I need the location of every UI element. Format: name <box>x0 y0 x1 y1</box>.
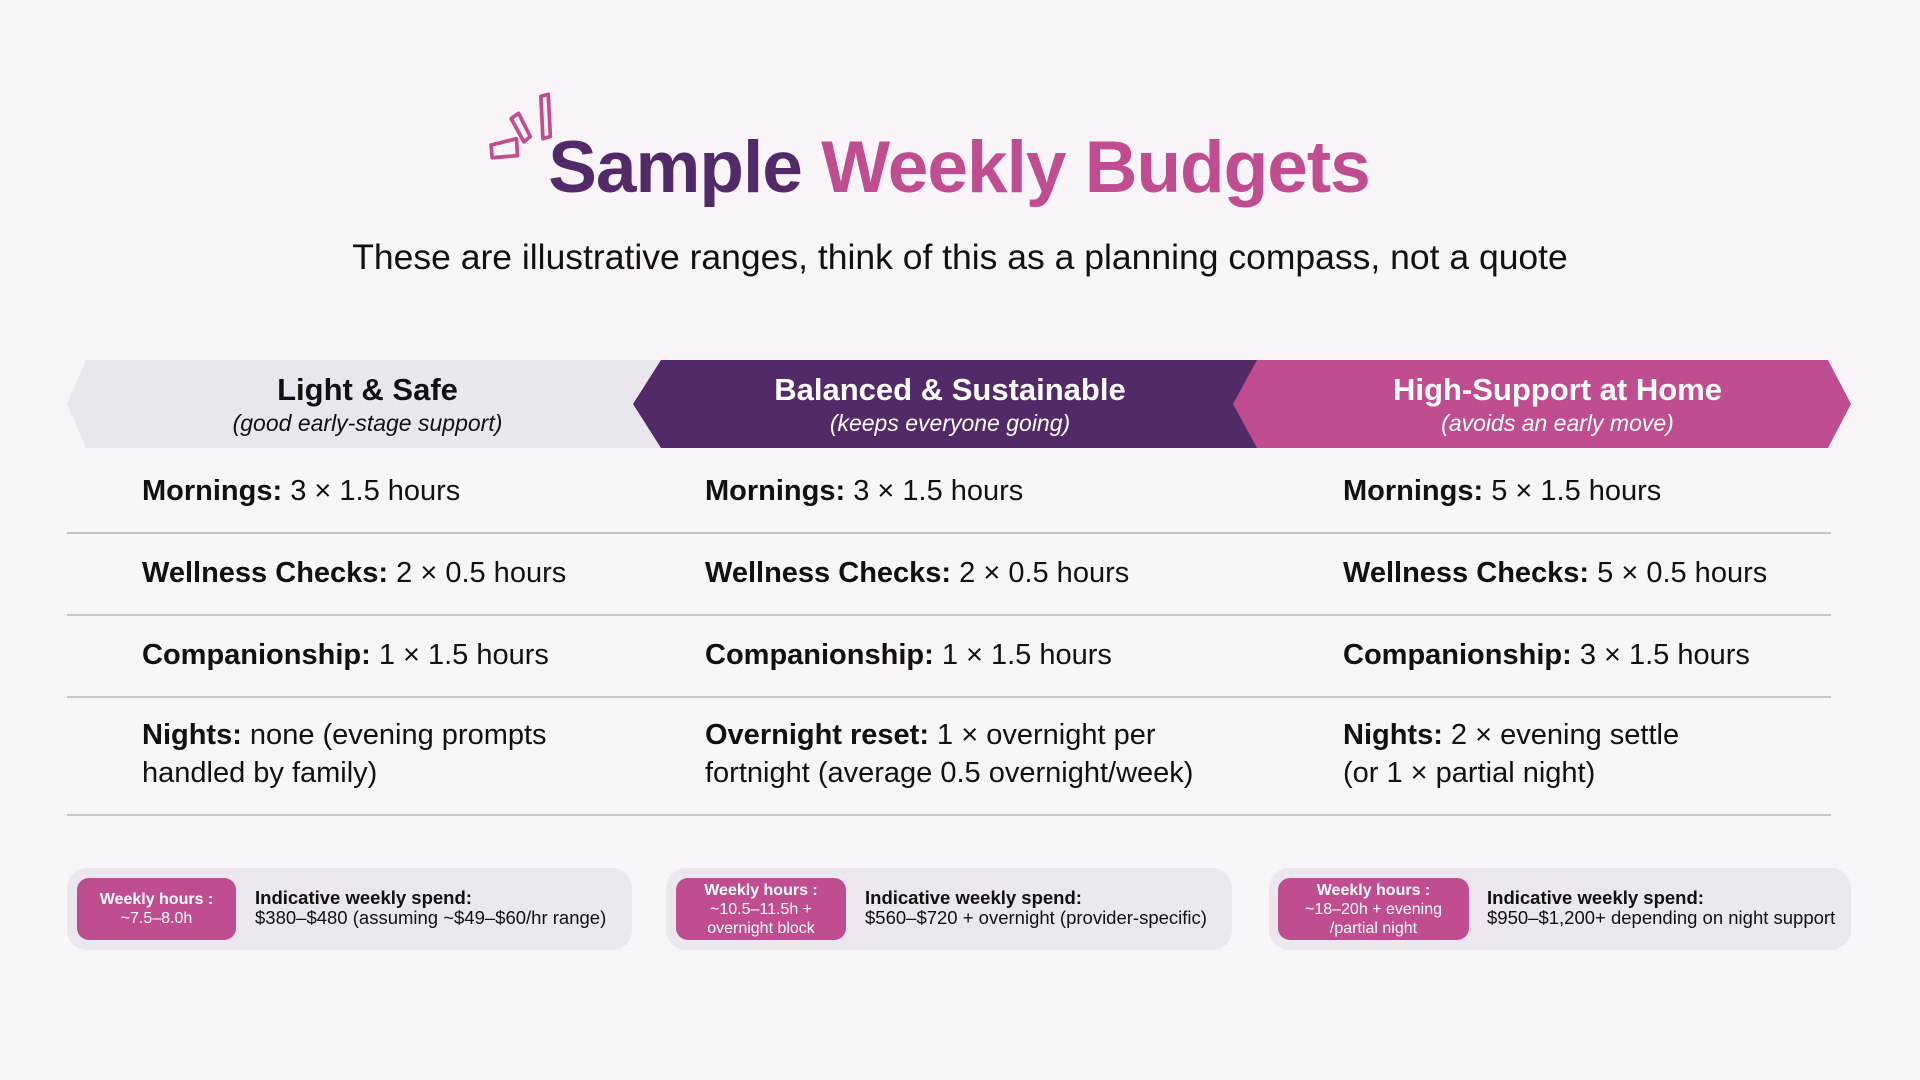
summary box 2: $560–$720 + overnight (provider-specific) <box>865 907 1207 928</box>
summary box 1: ~7.5–8.0h <box>121 910 192 927</box>
summary box 1 <box>67 868 632 950</box>
summary box 2: overnight block <box>707 920 815 936</box>
column 1 rows: Nights: none (evening prompts <box>142 719 547 751</box>
summary box 2: Indicative weekly spend: <box>865 887 1082 908</box>
subtitle: These are illustrative ranges, think of this as a planning compass, not a quote <box>352 237 1568 277</box>
column 3 rows: Mornings: 5 × 1.5 hours <box>1343 475 1661 507</box>
column 2 rows: fortnight (average 0.5 overnight/week) <box>705 757 1193 789</box>
summary box 3: Indicative weekly spend: <box>1487 887 1704 908</box>
header: Balanced <box>774 372 1126 436</box>
summary box 3: /partial night <box>1330 920 1417 936</box>
header: Light & Safe <box>233 372 502 436</box>
summary box 3: ~18–20h + evening <box>1305 900 1442 918</box>
summary box 2 <box>666 868 1232 950</box>
column 3 rows <box>1343 475 1767 789</box>
header: Light & Safe: (good early-stage support) <box>233 410 502 436</box>
column 1 rows <box>142 475 566 789</box>
summary box 3: Weekly hours : <box>1317 882 1430 898</box>
column 2 rows: Mornings: 3 × 1.5 hours <box>705 475 1023 507</box>
column 1 rows: handled by family) <box>142 757 377 789</box>
summary box 1: $380–$480 (assuming ~$49–$60/hr range) <box>255 907 606 928</box>
column 2 rows: Wellness Checks: 2 × 0.5 hours <box>705 557 1129 589</box>
column 3 rows: (or 1 × partial night) <box>1343 757 1595 789</box>
icon: accent strokes <box>489 92 552 160</box>
header: Light & Safe: Light & Safe <box>277 372 458 406</box>
column 3 rows: Companionship: 3 × 1.5 hours <box>1343 639 1750 671</box>
header: High-Support <box>1393 372 1722 436</box>
column 2 rows: Companionship: 1 × 1.5 hours <box>705 639 1112 671</box>
summary box 2: Weekly hours : <box>704 882 818 898</box>
summary box 1: Indicative weekly spend: <box>255 887 472 908</box>
summary box 3 <box>1269 868 1851 950</box>
column 3 rows: Nights: 2 × evening settle <box>1343 719 1679 751</box>
summary box 1: Weekly hours : <box>100 891 213 908</box>
header: Balanced: (keeps everyone going) <box>830 410 1070 436</box>
title: Sample Weekly Budgets <box>548 127 1370 208</box>
header bands <box>67 360 1851 448</box>
header: High-Support: High-Support at Home <box>1393 372 1722 406</box>
summary box 2: ~10.5–11.5h + <box>710 900 812 918</box>
summary box 3: $950–$1,200+ depending on night support <box>1487 907 1835 928</box>
column 1 rows: Wellness Checks: 2 × 0.5 hours <box>142 557 566 589</box>
column 2 rows: Overnight reset: 1 × overnight per <box>705 719 1156 751</box>
column 1 rows: Companionship: 1 × 1.5 hours <box>142 639 549 671</box>
column 3 rows: Wellness Checks: 5 × 0.5 hours <box>1343 557 1767 589</box>
column 1 rows: Mornings: 3 × 1.5 hours <box>142 475 460 507</box>
column 2 rows <box>705 475 1193 789</box>
header: High-Support: (avoids an early move) <box>1441 410 1674 436</box>
header: Balanced: Balanced & Sustainable <box>774 372 1126 406</box>
row dividers <box>67 532 1831 534</box>
